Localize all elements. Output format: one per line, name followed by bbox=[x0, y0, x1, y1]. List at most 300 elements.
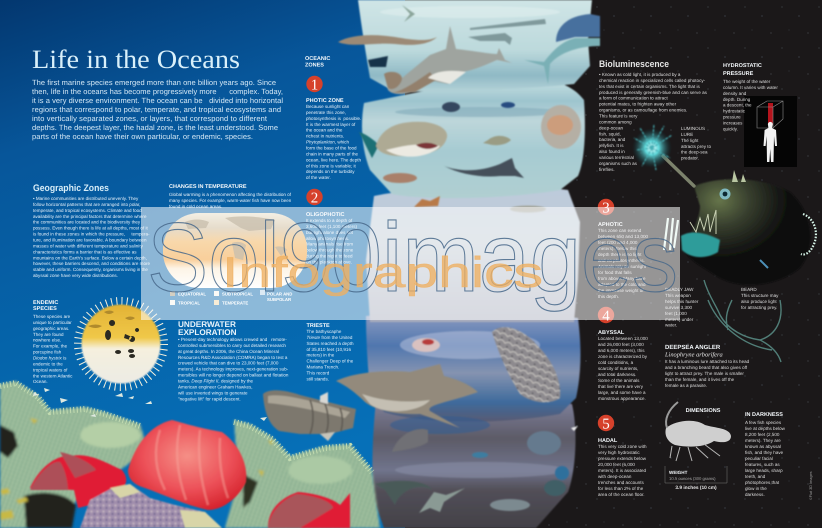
fish: round fish bbox=[544, 480, 566, 496]
fish: red spot bbox=[422, 339, 434, 345]
heading: deepsea angler: DEEPSEA ANGLER bbox=[665, 344, 721, 351]
coral: left anemone bed bbox=[0, 381, 148, 528]
text: geographic zones body: stable and uniform. Consequently, organisms living in the bbox=[33, 267, 148, 272]
callout: beard: also produce light bbox=[741, 299, 777, 304]
porcupine fish: yellow markings bbox=[88, 310, 135, 328]
box: weight bbox=[665, 466, 727, 483]
text: geographic zones body: possess. Even though there is life at all depths, most of it bbox=[33, 226, 148, 231]
text: trieste body: This record bbox=[306, 371, 330, 376]
text: bioluminescence body: organisms, or as camouflage from enemies. bbox=[599, 108, 687, 113]
text: deepsea angler body: than the female, and it lives off the bbox=[665, 377, 735, 382]
text: aphotic body: the immense weight of bbox=[598, 288, 644, 293]
heading: oligophotic: OLIGOPHOTIC bbox=[306, 212, 345, 218]
text: photic zone body: It is the warmest layer of bbox=[306, 122, 356, 127]
anglerfish: lure glow bbox=[632, 128, 672, 168]
heading: geographic zones: Geographic Zones bbox=[33, 183, 109, 194]
submarine: hull bbox=[263, 390, 356, 434]
heading: abyssal: ABYSSAL bbox=[598, 330, 625, 336]
callout: deadly jaw: helps this hunter bbox=[665, 299, 699, 304]
text: endemic species body: Diodon hystrix is bbox=[33, 356, 66, 361]
text: underwater exploration body: crewed vehicle that can dive to 23,000 feet (7,000 bbox=[178, 361, 279, 366]
heading: endemic species: ENDEMIC bbox=[33, 300, 58, 306]
text: hydrostatic pressure body: a descent, the bbox=[723, 103, 752, 108]
fish: long gray fish bbox=[490, 499, 530, 511]
callout: beard: BEARD bbox=[741, 287, 757, 292]
coral: left bed highlight bbox=[80, 422, 140, 448]
text: endemic species body: nowhere else. bbox=[33, 338, 61, 343]
text: geographic zones body: masses of water with different temperature and salinity bbox=[33, 243, 144, 248]
fish: small reef fish top bbox=[402, 5, 415, 22]
text: abyssal body: and 6,000 meters), this bbox=[598, 348, 645, 353]
text: aphotic body: for food that falls bbox=[598, 270, 632, 275]
text: bioluminescence body: tes that exist in certain organisms. The light that is bbox=[599, 84, 700, 89]
text: bioluminescence body: chemical reaction in specialized cells called photocy- bbox=[599, 78, 706, 83]
zone marker 5 bbox=[598, 415, 614, 432]
heading: dimensions: DIMENSIONS bbox=[686, 408, 721, 414]
heading: in darkness: IN DARKNESS bbox=[745, 412, 783, 418]
layer: photic upper block bbox=[358, 0, 592, 92]
title: Life in the Oceans bbox=[32, 44, 240, 74]
zone marker 1: 1 bbox=[311, 78, 318, 94]
zone marker 5: 5 bbox=[602, 416, 610, 432]
text: bioluminescence body: a form of communication to attract bbox=[599, 96, 668, 101]
text: hydrostatic pressure body: depth. During bbox=[723, 97, 751, 102]
shark: bull shark jaw bbox=[416, 143, 438, 149]
coral: pale rubble highlight bbox=[110, 484, 222, 528]
text: geographic zones body: temperate, and tropical ecosystems. Climate and food bbox=[33, 208, 142, 213]
anglerfish: upper-jaw teeth bbox=[690, 210, 716, 234]
text: in darkness body: glow in the bbox=[745, 486, 767, 491]
text: geographic zones body: ture, and illumination are favorable. A boundary between bbox=[33, 238, 147, 243]
text: aphotic body: depth there is no light bbox=[598, 252, 642, 257]
text: trieste body: States reached a depth bbox=[306, 341, 354, 346]
text: in darkness body: large heads, sharp bbox=[745, 468, 783, 473]
fish: sailfish bbox=[556, 14, 600, 42]
text: hadal body: meters). It is associated bbox=[598, 468, 646, 473]
callout: beard: for attracting prey. bbox=[741, 305, 777, 310]
anglerfish: body bbox=[684, 179, 811, 285]
text: geographic zones body: however, these barriers descend, and conditions are more bbox=[33, 261, 150, 266]
submarine: hull highlight bbox=[268, 395, 350, 418]
callout: deadly jaw: survive 3,300 bbox=[665, 305, 693, 310]
legend: tropical: TROPICAL bbox=[178, 300, 200, 306]
text: endemic species body: porcupine fish bbox=[33, 350, 62, 355]
text: changes in temperature body: found in cold ocean areas. bbox=[169, 204, 222, 209]
anglerfish: jaw bbox=[681, 233, 720, 257]
text: hydrostatic pressure body: pressure bbox=[723, 115, 741, 120]
diagram: human silhouette bbox=[764, 122, 777, 162]
fish: swordfish pair bbox=[468, 19, 546, 45]
text: oligophotic body: on the plankton above. bbox=[306, 260, 352, 265]
text: aphotic body: Animals rely on sunlight bbox=[598, 264, 647, 269]
shark: deep shark body bbox=[336, 364, 478, 428]
anglerfish: dorsal spines bbox=[732, 170, 746, 182]
text: geographic zones body: characteristics forms a barrier that is as effective as bbox=[33, 249, 137, 254]
text: oligophotic body: It extends to a depth of bbox=[306, 218, 353, 223]
fish: sunfish face bbox=[547, 115, 573, 135]
text: photic zone body: of this zone is variable; it bbox=[306, 163, 357, 168]
heading: hadal: HADAL bbox=[598, 438, 618, 444]
shark: bull shark body bbox=[376, 122, 447, 156]
diagram: dark panel bbox=[744, 96, 797, 167]
text: geographic zones body: • Marine communities are distributed unevenly. They bbox=[33, 196, 139, 201]
heading: hydrostatic pressure: PRESSURE bbox=[723, 71, 754, 77]
anglerfish: lower teeth under band bbox=[664, 218, 678, 250]
text: bioluminescence body: bacteria, and bbox=[599, 137, 626, 142]
text: bioluminescence body: fireflies. bbox=[599, 167, 615, 172]
text: in darkness body: photophores that bbox=[745, 480, 780, 485]
legend: polar and subpolar bbox=[260, 290, 292, 302]
text: underwater exploration body: American engineer Graham Hawkes, bbox=[178, 384, 253, 389]
coral: reef fish cluster bbox=[33, 388, 267, 421]
fish: blue fish bbox=[555, 466, 569, 480]
text: abyssal body: Located between 13,000 bbox=[598, 336, 648, 341]
text: bioluminescence body: produced is generally greenish-blue and can serve as bbox=[599, 90, 708, 95]
anglerfish: pupil bbox=[723, 192, 727, 196]
text: in darkness body: features, such as bbox=[745, 462, 780, 467]
text: photic zone body: photosynthesis is possible. bbox=[306, 116, 361, 121]
coral: purple rubble bbox=[80, 484, 222, 528]
intro paragraph: then, life in the oceans has become progressively more complex. Today, bbox=[32, 87, 283, 96]
text: in darkness body: peculiar facial bbox=[745, 456, 773, 461]
intro paragraph: regions that correspond to polar, temperate, and tropical ecosystems and bbox=[32, 105, 281, 114]
anglerfish: lure stalk bbox=[663, 156, 694, 186]
text: underwater exploration body: mersibles will no longer depend on ballast and flotation bbox=[178, 373, 289, 378]
fish: red and white fish bbox=[412, 338, 440, 352]
text: bioluminescence body: deep-ocean bbox=[599, 125, 623, 130]
text: oligophotic body: during the night to feed bbox=[306, 254, 353, 259]
text: hadal body: with deep-ocean bbox=[598, 474, 632, 479]
text: in darkness body: meters). They are bbox=[745, 438, 781, 443]
text: aphotic body: feet (200 and 4,000 bbox=[598, 240, 638, 245]
text: trieste body: Challenger Deep of the bbox=[306, 359, 354, 364]
text: hydrostatic pressure body: increases bbox=[723, 121, 743, 126]
text: hadal body: pressure extends below bbox=[598, 456, 647, 461]
intro paragraph: into vertically separated zones, or layers, that correspond to different bbox=[32, 114, 268, 123]
anemone: small red right muted lobes bbox=[268, 494, 333, 528]
text: geographic zones body: mountains on the Earth's surface. Below a certain depth, bbox=[33, 255, 147, 260]
coral: dark crevice right bbox=[243, 474, 258, 508]
anemone: small red left bbox=[30, 455, 126, 508]
text: hydrostatic pressure body: hydrostatic bbox=[723, 109, 746, 114]
intro paragraph: parts of the ocean have their own particular, or endemic, species. bbox=[32, 132, 253, 141]
text: hydrostatic pressure body: quickly. bbox=[723, 126, 738, 131]
text: photic zone body: chain in many parts of the bbox=[306, 151, 359, 156]
text: photic zone body: ocean, live here. The depth bbox=[306, 157, 361, 162]
text: photic zone body: Phytoplankton, which bbox=[306, 140, 349, 145]
porcupine fish: body bbox=[82, 304, 160, 384]
submarine: wing bbox=[320, 432, 335, 441]
text: hydrostatic pressure body: density and bbox=[723, 91, 747, 96]
callout: luminous lure: The light bbox=[681, 138, 699, 143]
fish: dark grouper bbox=[442, 102, 460, 112]
zone marker 3 bbox=[598, 199, 614, 216]
value: length: 3.9 inches (10 cm) bbox=[675, 485, 717, 491]
chart: world map of marine regions bbox=[163, 213, 307, 306]
text: in darkness body: teeth, and bbox=[745, 474, 766, 479]
text: underwater exploration body: controlled submersibles to carry out detailed research bbox=[178, 343, 286, 348]
text: underwater exploration body: • Present-day technology allows crewed and remote- bbox=[178, 337, 287, 342]
anemone: big red streaks bbox=[156, 425, 228, 505]
shark: hammerhead head shading bbox=[384, 72, 436, 93]
coral: right bed highlight bbox=[288, 456, 352, 484]
fish: striped butterfly fish bbox=[368, 56, 388, 67]
text: trieste body: Trieste from the United bbox=[306, 335, 352, 340]
fish: blue-gray fish bbox=[527, 431, 561, 455]
text: hadal body: 20,000 feet (6,000 bbox=[598, 462, 635, 467]
watermark: outlined lettering: Sol90images bbox=[147, 202, 678, 312]
text: endemic species body: tropical waters of bbox=[33, 367, 68, 372]
heading: oceanic zones: ZONES bbox=[305, 62, 324, 68]
zone marker 4: 4 bbox=[602, 308, 610, 324]
text: oligophotic body: below through the zone bbox=[306, 248, 354, 253]
legend: temperate: TEMPERATE bbox=[222, 300, 248, 306]
callout: luminous lure: LURE bbox=[681, 132, 693, 137]
text: bioluminescence body: also found in bbox=[599, 149, 625, 154]
zone marker 4 bbox=[598, 307, 614, 324]
coral: right anemone bed bbox=[225, 420, 380, 528]
intro paragraph: The first marine species emerged more than one billion years ago. Since bbox=[32, 78, 276, 87]
intro paragraph bbox=[32, 78, 283, 141]
watermark band bbox=[141, 207, 680, 320]
text: endemic species body: unique to particular bbox=[33, 320, 72, 325]
illustration: ocean column of stacked water layers bbox=[358, 0, 592, 528]
text: underwater exploration body: at great depths. In 2006, the China Ocean Mineral bbox=[178, 349, 279, 354]
diagram: anglerfish silhouette bbox=[665, 402, 731, 461]
text: photic zone body: form the base of the food bbox=[306, 146, 357, 151]
text: photic zone body: depends on the turbidity bbox=[306, 169, 355, 174]
text: geographic zones body: is found in these zones in which the pressure, tempera- bbox=[33, 232, 150, 237]
legend bbox=[170, 290, 292, 306]
text: geographic zones body: availability are the principal factors that determine where bbox=[33, 214, 147, 219]
text: trieste body: of 35,810 feet (10,916 bbox=[306, 347, 351, 352]
text: underwater exploration body: "negative lift" for rapid descent. bbox=[178, 396, 241, 401]
legend: subtropical: SUBTROPICAL bbox=[222, 292, 253, 296]
callout: deadly jaw: feet (1,000 bbox=[665, 311, 687, 316]
submarine: fin bbox=[320, 392, 328, 404]
text: bioluminescence body: common among bbox=[599, 119, 632, 124]
fish: sailfish body and tail bbox=[524, 38, 600, 84]
heading: changes in temperature: CHANGES IN TEMPERATURE bbox=[169, 184, 247, 190]
text: underwater exploration body: will use inverted wings to generate bbox=[178, 390, 248, 395]
text: photic zone body: Because sunlight can bbox=[306, 104, 350, 109]
text: photic zone body: richest in nutrients. bbox=[306, 134, 344, 139]
text: aphotic body: adapted to the cold and bbox=[598, 282, 646, 287]
text: endemic species body: the western Atlantic bbox=[33, 373, 73, 378]
text: in darkness body: live at depths below bbox=[745, 426, 786, 431]
text: endemic species body: They are found bbox=[33, 332, 64, 337]
text: aphotic body: from above. Many have bbox=[598, 276, 646, 281]
text: endemic species body: These species are bbox=[33, 314, 71, 319]
shark: deep shark belly bbox=[362, 394, 430, 411]
text: underwater exploration body: meters). As technology improves, next-generation sub- bbox=[178, 367, 289, 372]
text: bioluminescence body: organisms such as bbox=[599, 161, 638, 166]
text: bioluminescence body: This feature is very bbox=[599, 114, 638, 119]
zone marker 3: 3 bbox=[602, 200, 610, 216]
text: in darkness body: fish, and they have bbox=[745, 450, 784, 455]
text: abyssal body: cold conditions, a bbox=[598, 360, 634, 365]
heading: underwater exploration: EXPLORATION bbox=[178, 328, 237, 337]
text: hadal body: for less than 2% of the bbox=[598, 486, 644, 491]
zone marker 1 bbox=[306, 76, 323, 94]
fish: sunfish bbox=[541, 105, 581, 149]
text: oligophotic body: but light alone does not bbox=[306, 230, 354, 235]
text: in darkness body: known as abyssal bbox=[745, 444, 781, 449]
text: abyssal body: large, and some have a bbox=[598, 390, 646, 395]
layer: hadal block bbox=[372, 400, 575, 528]
legend: polar and subpolar: SUBPOLAR bbox=[267, 297, 292, 302]
fish group: photic zone bbox=[338, 5, 600, 212]
heading: trieste: TRIESTE bbox=[306, 323, 330, 329]
text: oligophotic body: Many animals rise from bbox=[306, 242, 353, 247]
text: deepsea angler body: light to attract prey. The male is smaller bbox=[665, 371, 744, 376]
legend: polar and subpolar: POLAR AND bbox=[267, 292, 292, 296]
heading: hydrostatic pressure: HYDROSTATIC bbox=[723, 63, 762, 69]
zone marker 2: 2 bbox=[311, 190, 318, 206]
anglerfish: small blue fin bbox=[760, 260, 768, 268]
text: underwater exploration body: tanks. Deep Flight II, designed by the bbox=[178, 379, 253, 384]
anemones and rubble bbox=[30, 420, 350, 528]
text: trieste body: Mariana Trench. bbox=[306, 365, 339, 370]
text: in darkness body: 8,200 feet (2,500 bbox=[745, 432, 780, 437]
text: bioluminescence body: • Known as cold light, it is produced by a bbox=[599, 72, 681, 77]
heading: oceanic zones: OCEANIC bbox=[305, 56, 330, 62]
map: land masses bbox=[185, 216, 287, 260]
submarine: deep-flight vehicle bbox=[263, 390, 356, 441]
legend: equatorial: EQUATORIAL bbox=[178, 292, 206, 296]
fish: eel-like fish bbox=[338, 35, 437, 45]
intro paragraph: it is a very diverse environment. The ocean can be divided into horizontal bbox=[32, 96, 283, 105]
text: changes in temperature body: Global warming is a phenomenon affecting the distribution of bbox=[169, 192, 292, 197]
text: bioluminescence body: fish, squid, bbox=[599, 131, 621, 136]
diagram: wireframe cube bbox=[757, 101, 783, 128]
anemone: big red bbox=[128, 420, 246, 510]
callout: beard: This structure may bbox=[741, 293, 779, 298]
callout: deadly jaw: water. bbox=[665, 323, 677, 328]
text: aphotic body: this depth. bbox=[598, 294, 619, 299]
anglerfish: beard bbox=[704, 280, 781, 362]
anemone: small red right bbox=[268, 492, 350, 528]
text: in darkness body: darkness. bbox=[745, 492, 765, 497]
label: weight: WEIGHT bbox=[669, 470, 688, 475]
text: hydrostatic pressure body: The weight of the water bbox=[723, 79, 771, 84]
porcupine fish: spots bbox=[105, 320, 139, 358]
text: bioluminescence body: potential mates, to frighten away other bbox=[599, 102, 677, 107]
layer: oligophotic block bbox=[366, 187, 580, 322]
text: deepsea angler body: It has a luminous lure attached to its head bbox=[665, 359, 750, 364]
anemone: small red left muted lobes bbox=[30, 452, 96, 490]
text: photic zone body: penetrate this zone, bbox=[306, 110, 346, 115]
text: trieste body: still stands. bbox=[306, 376, 329, 381]
coral: dark crevice left bbox=[0, 425, 76, 528]
fish: tiny white fish bbox=[571, 426, 578, 431]
coral: anemone beds and crevices bbox=[0, 381, 380, 528]
text: aphotic body: meters). Below this bbox=[598, 246, 637, 251]
callout: luminous lure: predator. bbox=[681, 156, 699, 161]
fish: giant grouper bbox=[492, 327, 560, 402]
map: pill-shaped world map bbox=[163, 213, 307, 288]
text: hadal body: area of the ocean floor. bbox=[598, 492, 645, 497]
text: hadal body: This very cold zone with bbox=[598, 444, 647, 449]
text: deepsea angler body: and a branching beard that also gives off bbox=[665, 365, 748, 370]
callout: luminous lure: attracts prey to bbox=[681, 144, 712, 149]
text: abyssal body: and total darkness. bbox=[598, 372, 636, 377]
fish: tiny blue fish bbox=[472, 452, 488, 458]
shark: bull shark tail bbox=[359, 132, 379, 158]
text: aphotic body: between 650 and 13,000 bbox=[598, 234, 649, 239]
text: abyssal body: Some of the animals bbox=[598, 378, 640, 383]
silhouette: body bbox=[665, 421, 731, 447]
heading: bioluminescence: Bioluminescence bbox=[599, 58, 669, 69]
intro paragraph: depths. The deepest layer, the hadal zone, is the least understood. Some bbox=[32, 123, 278, 132]
text: trieste body: meters) in the bbox=[306, 353, 335, 358]
text: aphotic body: This zone can extend bbox=[598, 228, 642, 233]
text: oligophotic body: allow photosynthesis. bbox=[306, 236, 349, 241]
fish: blue tang bbox=[501, 102, 515, 108]
text: photic zone body: of the water. bbox=[306, 175, 331, 180]
text: abyssal body: and 26,000 feet (3,000 bbox=[598, 342, 644, 347]
fish: dark bass bbox=[392, 429, 428, 452]
text: bioluminescence body: various terrestrial bbox=[599, 155, 634, 160]
illustration: coral reef foreground bbox=[0, 381, 380, 528]
text: abyssal body: zone is characterized by bbox=[598, 354, 648, 359]
text: endemic species body: endemic to the bbox=[33, 361, 63, 366]
zone marker 2 bbox=[306, 189, 323, 206]
porcupine fish: spines bbox=[78, 301, 164, 387]
species name: Linophryne arborifera bbox=[664, 352, 723, 358]
fish: dark manta bbox=[375, 481, 432, 505]
shark: bull shark belly bbox=[386, 144, 440, 157]
text: aphotic body: and no photosynthesis. bbox=[598, 258, 645, 263]
text: geographic zones body: follow horizontal patterns that are arranged into polar, bbox=[33, 202, 140, 207]
text: abyssal body: that live there are very bbox=[598, 384, 644, 389]
text: geographic zones body: abyssal zone have very wide distributions. bbox=[33, 273, 118, 278]
coral: brown reef fragment bbox=[383, 173, 417, 183]
credit: ©Fiat 3D Images bbox=[809, 471, 813, 500]
anglerfish: eye bbox=[720, 188, 730, 200]
text: abyssal body: scarcity of nutrients, bbox=[598, 366, 638, 371]
background: ocean blue left side bbox=[0, 0, 405, 528]
callout: luminous lure: the deep-sea bbox=[681, 150, 708, 155]
anglerfish: luminous dorsal fin arc bbox=[801, 214, 816, 255]
heading: underwater exploration: UNDERWATER bbox=[178, 320, 236, 329]
callout: deadly jaw: This weapon bbox=[665, 293, 691, 298]
submarine: hull bands bbox=[310, 400, 342, 434]
callout: deadly jaw: DEADLY JAW bbox=[665, 287, 694, 292]
text: changes in temperature body: many species. For example, warm-water fish have now been bbox=[169, 198, 292, 203]
porcupine fish bbox=[78, 301, 164, 387]
text: hadal body: very high hydrostatic bbox=[598, 450, 640, 455]
watermark: orange lettering: Infographics bbox=[222, 249, 543, 297]
coral: brown branch at oligophotic top bbox=[414, 196, 440, 207]
fish: small silver fish bbox=[483, 136, 511, 145]
text: geographic zones body: the communities are located and the biodiversity they bbox=[33, 220, 141, 225]
fish: pale ray bbox=[419, 488, 465, 513]
text: bioluminescence body: jellyfish. It is bbox=[598, 143, 624, 148]
coral: yellow reef bits bbox=[0, 418, 274, 520]
text: abyssal body: monstrous appearance. bbox=[598, 396, 646, 401]
heading: endemic species: SPECIES bbox=[33, 306, 57, 312]
coral: tentacle fringe left bbox=[0, 383, 140, 426]
text: endemic species body: For example, the bbox=[33, 344, 68, 349]
anglerfish illustration bbox=[632, 124, 816, 362]
coral: tentacle fringe right bbox=[234, 422, 372, 472]
heading: aphotic: APHOTIC bbox=[598, 222, 623, 228]
layer: abyssal block bbox=[366, 313, 580, 422]
text: in darkness body: A few fish species bbox=[745, 420, 782, 425]
text: trieste body: The bathyscaphe bbox=[306, 329, 342, 334]
layer: photic lower block bbox=[362, 80, 585, 198]
